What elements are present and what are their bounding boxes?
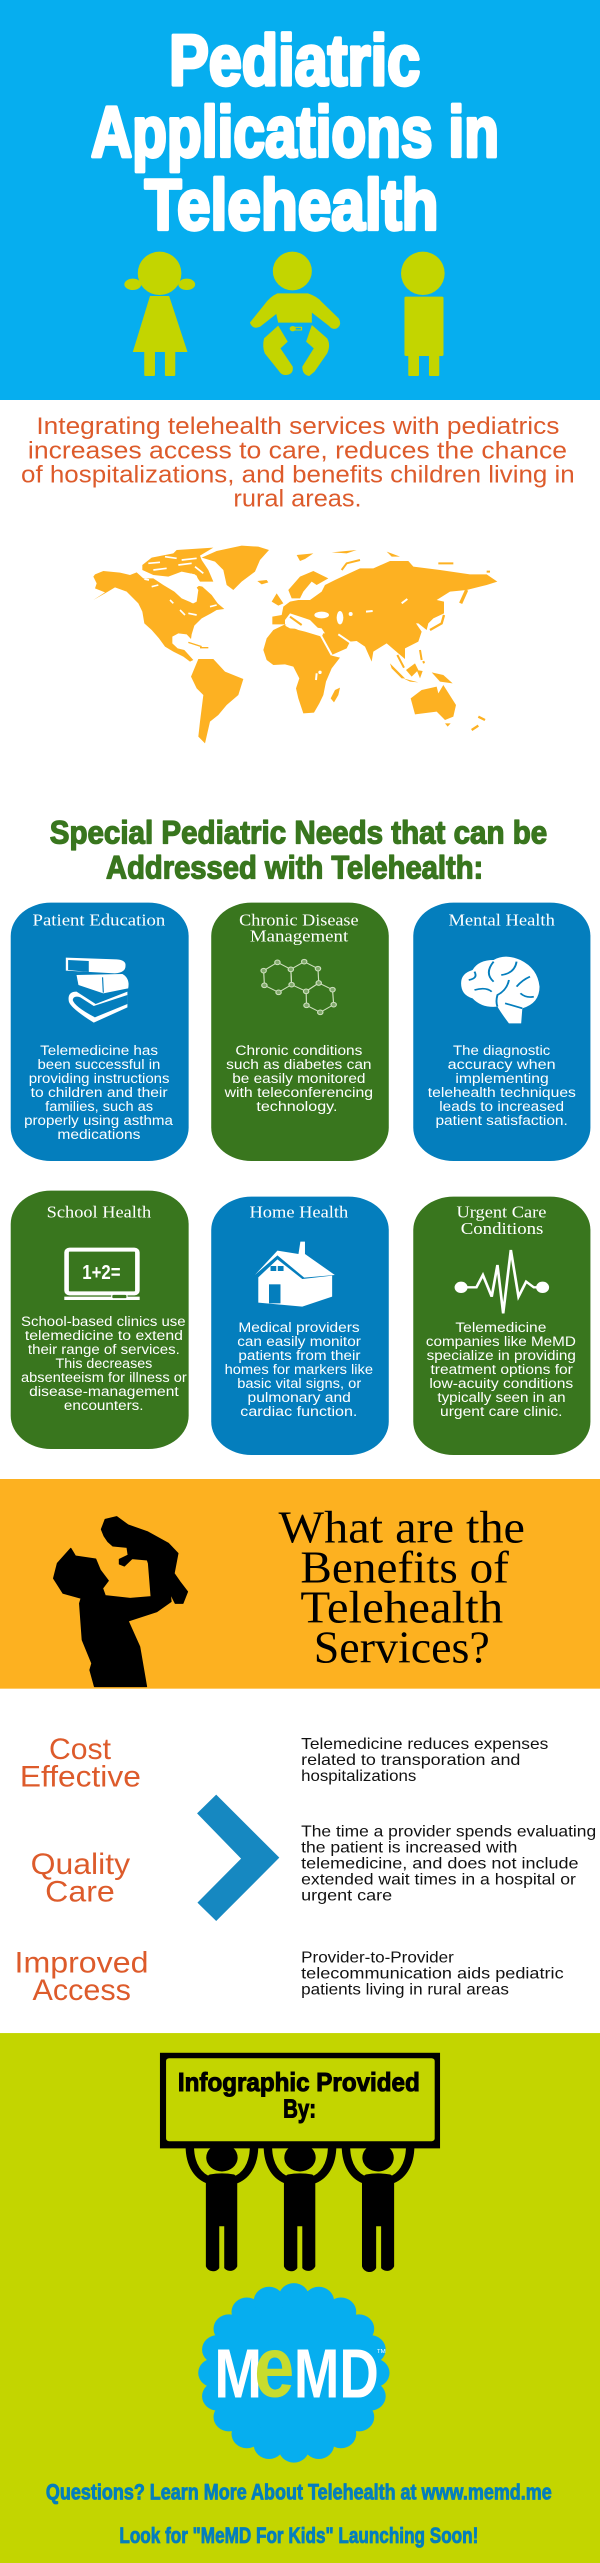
heading: benefits [279,1503,525,1673]
icon: heartbeat line [455,1250,549,1313]
benefit descriptions: related to transporation and [301,1750,520,1769]
benefit descriptions: Provider-to-Provider [301,1948,454,1966]
panel: header [0,0,600,400]
panel: chronic disease management: technology. [256,1099,337,1115]
panel: school health: absenteeism for illness or [21,1370,187,1386]
benefit descriptions: hospitalizations [301,1766,416,1785]
panel: home health: pulmonary and [248,1390,351,1406]
heading: benefits: Services? [314,1623,490,1673]
heading: benefits: Telehealth [300,1583,503,1633]
panel: benefits banner [0,1479,600,1689]
americas [93,546,269,743]
panel: chronic disease management: with teleconferencing [224,1085,373,1101]
panel: home health: basic vital signs, or [237,1376,361,1392]
intro text [21,414,575,512]
intro text: of hospitalizations, and benefits children living in [21,462,575,488]
sign: Infographic Provided [178,2068,420,2097]
logo: MeMD badge: M [214,2334,262,2412]
panel: urgent care conditions: Telemedicine [455,1320,546,1336]
panel: urgent care conditions: typically seen in an [437,1390,566,1406]
panel: footer [0,2033,600,2563]
panel: patient education: properly using asthma [24,1113,174,1129]
title [91,21,499,245]
title: Telehealth [145,165,439,245]
panel: school health: encounters. [64,1398,143,1414]
benefit descriptions: urgent care [301,1886,392,1904]
sign: By: [283,2094,316,2123]
panel: school health [11,1191,189,1449]
logo: MeMD badge: e [254,2318,294,2415]
panel: patient education: Patient Education [33,911,166,930]
heading: benefits: Benefits of [300,1543,510,1593]
benefit descriptions: Telemedicine reduces expenses [301,1734,548,1753]
panel: school health: disease-management [29,1384,180,1400]
panel: patient education: medications [57,1127,140,1143]
benefit descriptions: extended wait times in a hospital or [301,1870,576,1888]
panel: school health: their range of services. [28,1342,180,1358]
panel: urgent care conditions: companies like MeMD [426,1334,576,1350]
panel: chronic disease management: Management [250,927,349,946]
panel: urgent care conditions: Urgent Care [457,1203,546,1222]
panel: chronic disease management: Chronic conditions [235,1043,362,1059]
panel: patient education: been successful in [37,1057,160,1073]
icon: house [255,1242,335,1307]
panel: patient education: to children and their [31,1085,168,1101]
icon: books [66,958,129,1023]
section heading: special needs [50,815,547,886]
panel: chronic disease management: such as diabetes can [226,1057,372,1073]
panel: mental health: Mental Health [448,911,556,930]
panel: home health: homes for markers like [225,1362,373,1378]
benefit descriptions: the patient is increased with [301,1838,517,1856]
panel: urgent care conditions: specialize in providing [427,1348,576,1364]
intro text: increases access to care, reduces the chance [28,438,567,464]
panel: school health: School-based clinics use [21,1314,186,1330]
benefit descriptions: telemedicine, and does not include [301,1854,579,1872]
eurasia, africa and oceania [263,550,497,730]
panel: home health: Home Health [249,1203,349,1222]
panel: chronic disease management: Chronic Disease [239,911,359,930]
benefit labels: Cost [49,1732,111,1766]
panel: patient education: families, such as [45,1099,153,1115]
title: Pediatric [169,21,420,101]
icon: brain [461,957,540,1023]
panel: chronic disease management [211,903,389,1161]
section heading: special needs: Addressed with Telehealth: [106,850,483,886]
benefit labels: Improved [15,1946,148,1979]
panel: benefits list [15,1732,596,2006]
benefit descriptions: patients living in rural areas [301,1980,509,1998]
panel: patient education: providing instructions [29,1071,170,1087]
intro text: Integrating telehealth services with pediatrics [36,414,559,440]
panel: urgent care conditions: low-acuity conditions [429,1376,573,1392]
panel: school health: School Health [47,1203,152,1222]
intro text: rural areas. [233,486,362,512]
logo: MeMD badge [198,2283,390,2463]
panel: home health: can easily monitor [237,1334,361,1350]
benefit labels: Effective [20,1760,141,1793]
panel: home health: patients from their [238,1348,360,1364]
world map [93,546,497,743]
panel: mental health: The diagnostic [453,1043,551,1059]
benefit descriptions: telecommunication aids pediatric [301,1964,564,1982]
panel: mental health: telehealth techniques [428,1085,576,1101]
panel: school health: This decreases [55,1356,152,1372]
icon: baby in diaper [250,252,340,376]
logo: MeMD badge: MD [294,2334,379,2412]
logo: MeMD badge: TM [377,2349,386,2355]
panel: urgent care conditions: Conditions [461,1219,543,1239]
panel: home health: Medical providers [238,1320,360,1336]
icon: three people holding sign [190,2144,410,2272]
icon: chalkboard [64,1250,140,1300]
sign [160,2053,440,2148]
panel: mental health: patient satisfaction. [435,1113,568,1129]
panel: home health [211,1197,389,1455]
panel: urgent care conditions [413,1197,590,1455]
panel: mental health [413,903,590,1161]
panel: chronic disease management: be easily monitored [232,1071,365,1087]
heading: benefits: What are the [279,1503,525,1553]
icon: parent lifting baby silhouette [54,1517,187,1687]
icon: girl [124,252,195,376]
benefit labels: Quality [31,1847,131,1881]
benefit labels [15,1732,148,2006]
panel: home health: cardiac function. [240,1404,357,1420]
panel: patient education: Telemedicine has [40,1043,158,1059]
icon: boy [401,252,445,376]
icon: chalkboard: 1+2= [82,1260,121,1284]
panel: mental health: accuracy when [448,1057,556,1073]
arrow: chevron [197,1795,279,1921]
benefit labels: Care [45,1874,115,1908]
benefit descriptions [301,1734,596,1998]
benefit labels: Access [33,1973,131,2006]
panel: school health: telemedicine to extend [25,1328,183,1344]
panel: urgent care conditions: urgent care clinic. [440,1404,562,1420]
icon: molecule [261,959,336,1015]
panel: patient education [11,903,189,1161]
panel: urgent care conditions: treatment options for [430,1362,573,1378]
panel: mental health: leads to increased [439,1099,564,1115]
panel: mental health: implementing [455,1071,549,1087]
